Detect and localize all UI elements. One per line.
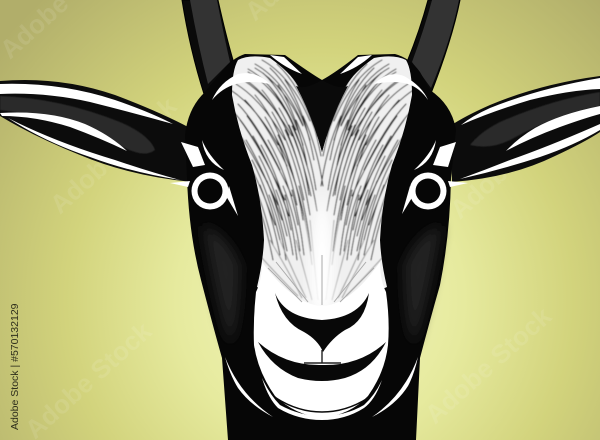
center light strip — [310, 190, 334, 310]
right upright ear speckle — [412, 0, 459, 88]
ear white stripe lower — [8, 118, 180, 180]
right strands — [321, 60, 415, 300]
watermark: Adobe Stock — [419, 300, 558, 429]
left jaw line — [225, 357, 273, 417]
ear white stripe middle — [506, 106, 600, 151]
left brow curl — [212, 73, 270, 100]
ear white stripe lower — [460, 124, 600, 179]
watermark: Adobe Stock — [44, 90, 183, 219]
ear grey shading — [470, 92, 600, 147]
muzzle — [254, 262, 389, 418]
left upright ear — [182, 0, 233, 94]
muzzle top strands — [268, 255, 374, 305]
fur base — [232, 56, 412, 306]
philtrum and lip line — [304, 350, 341, 363]
right eye — [402, 140, 468, 214]
left strands — [229, 60, 323, 300]
right upright ear — [407, 0, 460, 96]
right side ear — [450, 76, 600, 182]
stock id label: Adobe Stock | #570132129 — [9, 303, 21, 430]
right jaw line — [372, 357, 418, 417]
mouth — [258, 342, 386, 381]
center dark parting — [296, 80, 348, 152]
ear grey shading — [0, 96, 155, 154]
face shading — [203, 225, 441, 345]
ear white stripe middle — [0, 112, 127, 151]
left upright ear speckle — [190, 0, 230, 84]
brow marks — [181, 142, 205, 167]
ear white stripe top — [0, 84, 173, 124]
brow marks — [433, 142, 456, 167]
left eye — [170, 140, 238, 216]
watermark: Adobe Stock — [444, 95, 583, 224]
forehead highlights — [270, 55, 372, 74]
left side ear — [0, 80, 192, 182]
fur blaze — [232, 56, 412, 306]
ear white stripe top — [461, 78, 600, 125]
nostrils and nose — [275, 293, 369, 352]
right brow curl — [374, 74, 428, 100]
chin line — [262, 378, 382, 420]
head silhouette — [185, 54, 456, 440]
